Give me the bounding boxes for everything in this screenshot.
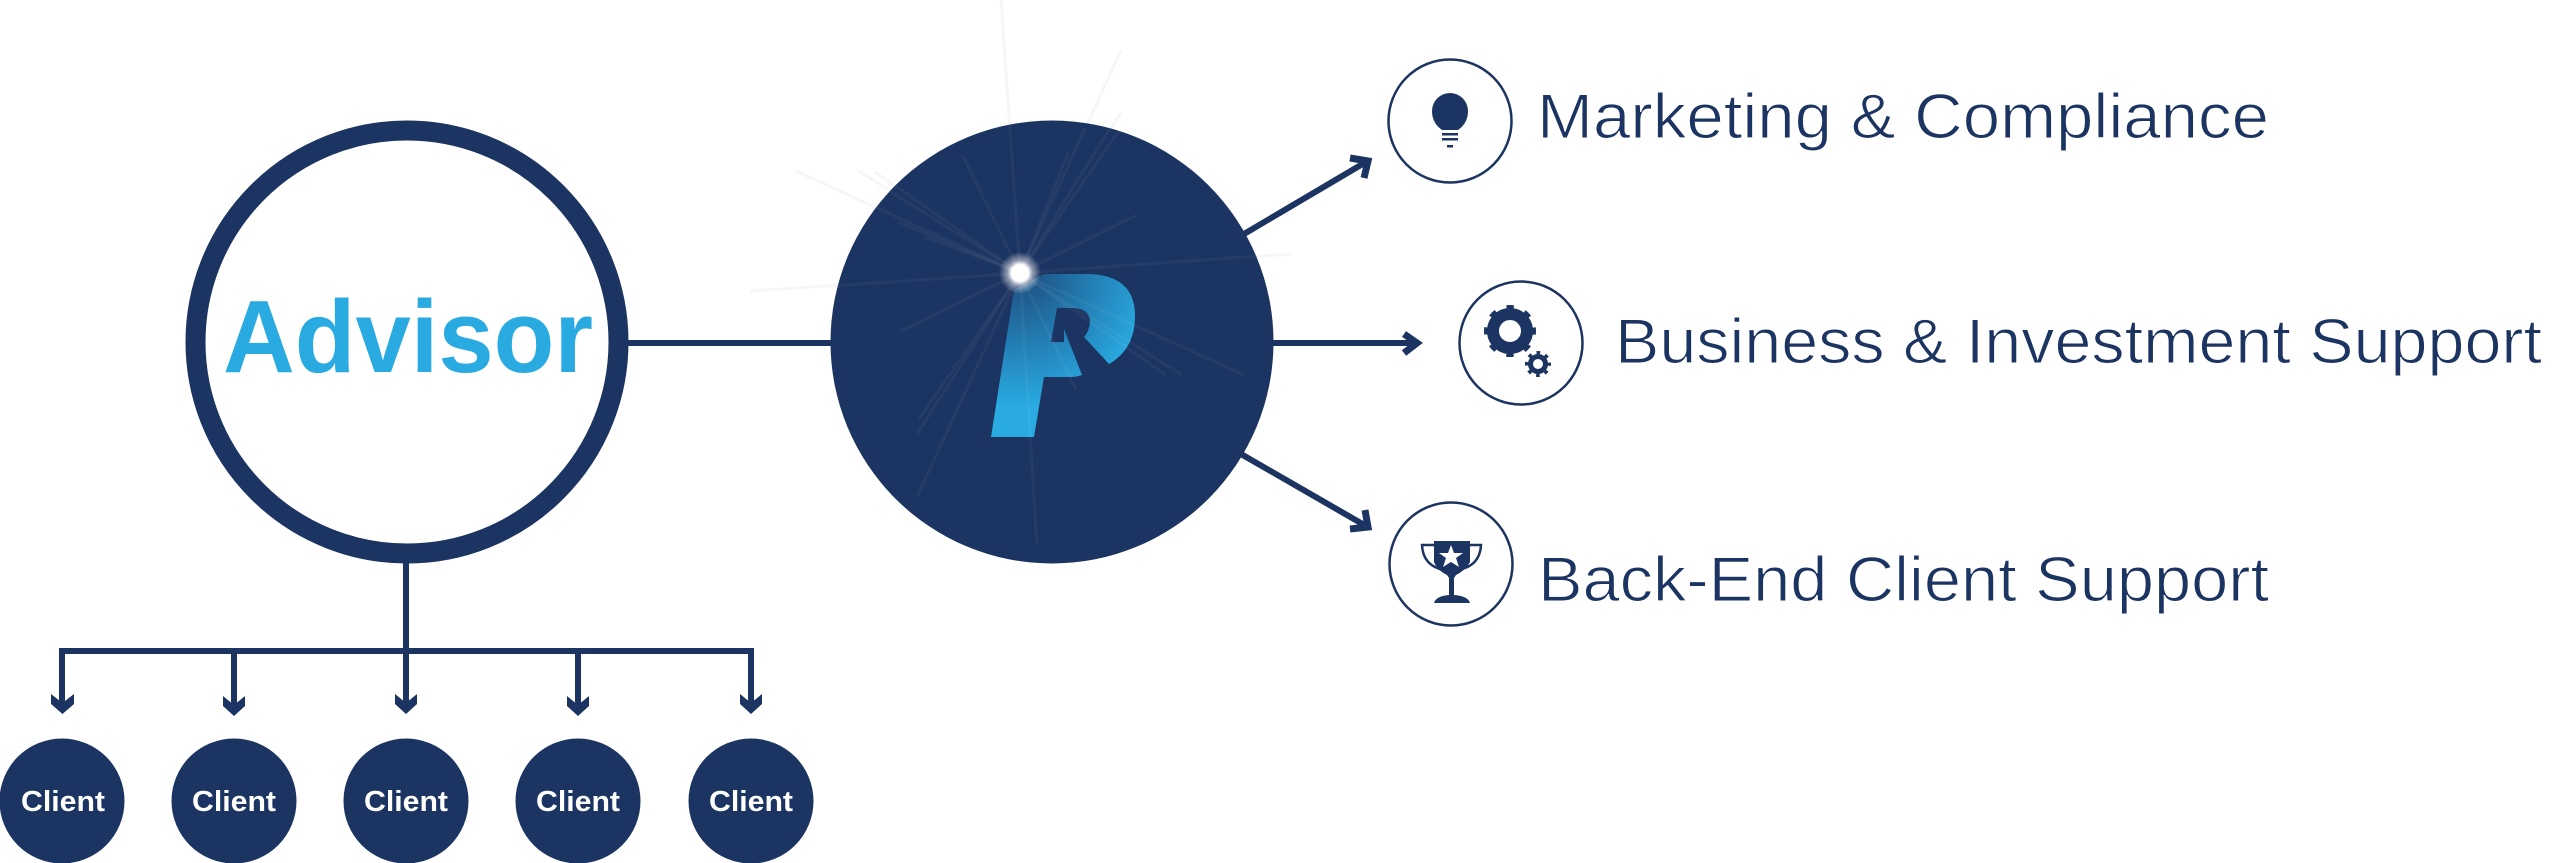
arrow: to business support bbox=[1273, 334, 1418, 353]
label: marketing: Marketing & Compliance bbox=[1537, 82, 2269, 152]
arrowheads: down bbox=[51, 694, 762, 716]
advisor ring bbox=[196, 130, 618, 554]
label: business support: Business & Investment Support bbox=[1615, 307, 2543, 377]
client 3: Client bbox=[364, 786, 448, 818]
client 1 bbox=[0, 738, 124, 863]
arrow: to client support bbox=[1241, 454, 1368, 529]
client 1: Client bbox=[21, 786, 105, 818]
icon: trophy bbox=[1390, 502, 1512, 626]
client 5 bbox=[688, 738, 814, 863]
label: client support: Back-End Client Support bbox=[1538, 545, 2270, 615]
light rays outside hub bbox=[750, 0, 1291, 291]
hub circle bbox=[830, 120, 1274, 564]
client 2 bbox=[172, 738, 296, 863]
client 5: Client bbox=[709, 786, 793, 818]
connector: advisor to hub bbox=[620, 340, 840, 346]
client 3 bbox=[344, 738, 468, 863]
client tree connectors bbox=[51, 560, 762, 716]
logo: light flare bbox=[999, 252, 1041, 294]
light rays inside hub bbox=[831, 115, 1272, 545]
arrow: to marketing bbox=[1244, 158, 1368, 234]
logo: P mark bbox=[991, 274, 1135, 437]
icon: gears bbox=[1460, 282, 1582, 404]
advisor label: Advisor bbox=[223, 279, 593, 394]
client 4: Client bbox=[536, 786, 620, 818]
client nodes bbox=[0, 738, 814, 863]
client 4 bbox=[516, 738, 640, 863]
client 2: Client bbox=[192, 786, 276, 818]
icon: light bulb bbox=[1388, 60, 1512, 182]
